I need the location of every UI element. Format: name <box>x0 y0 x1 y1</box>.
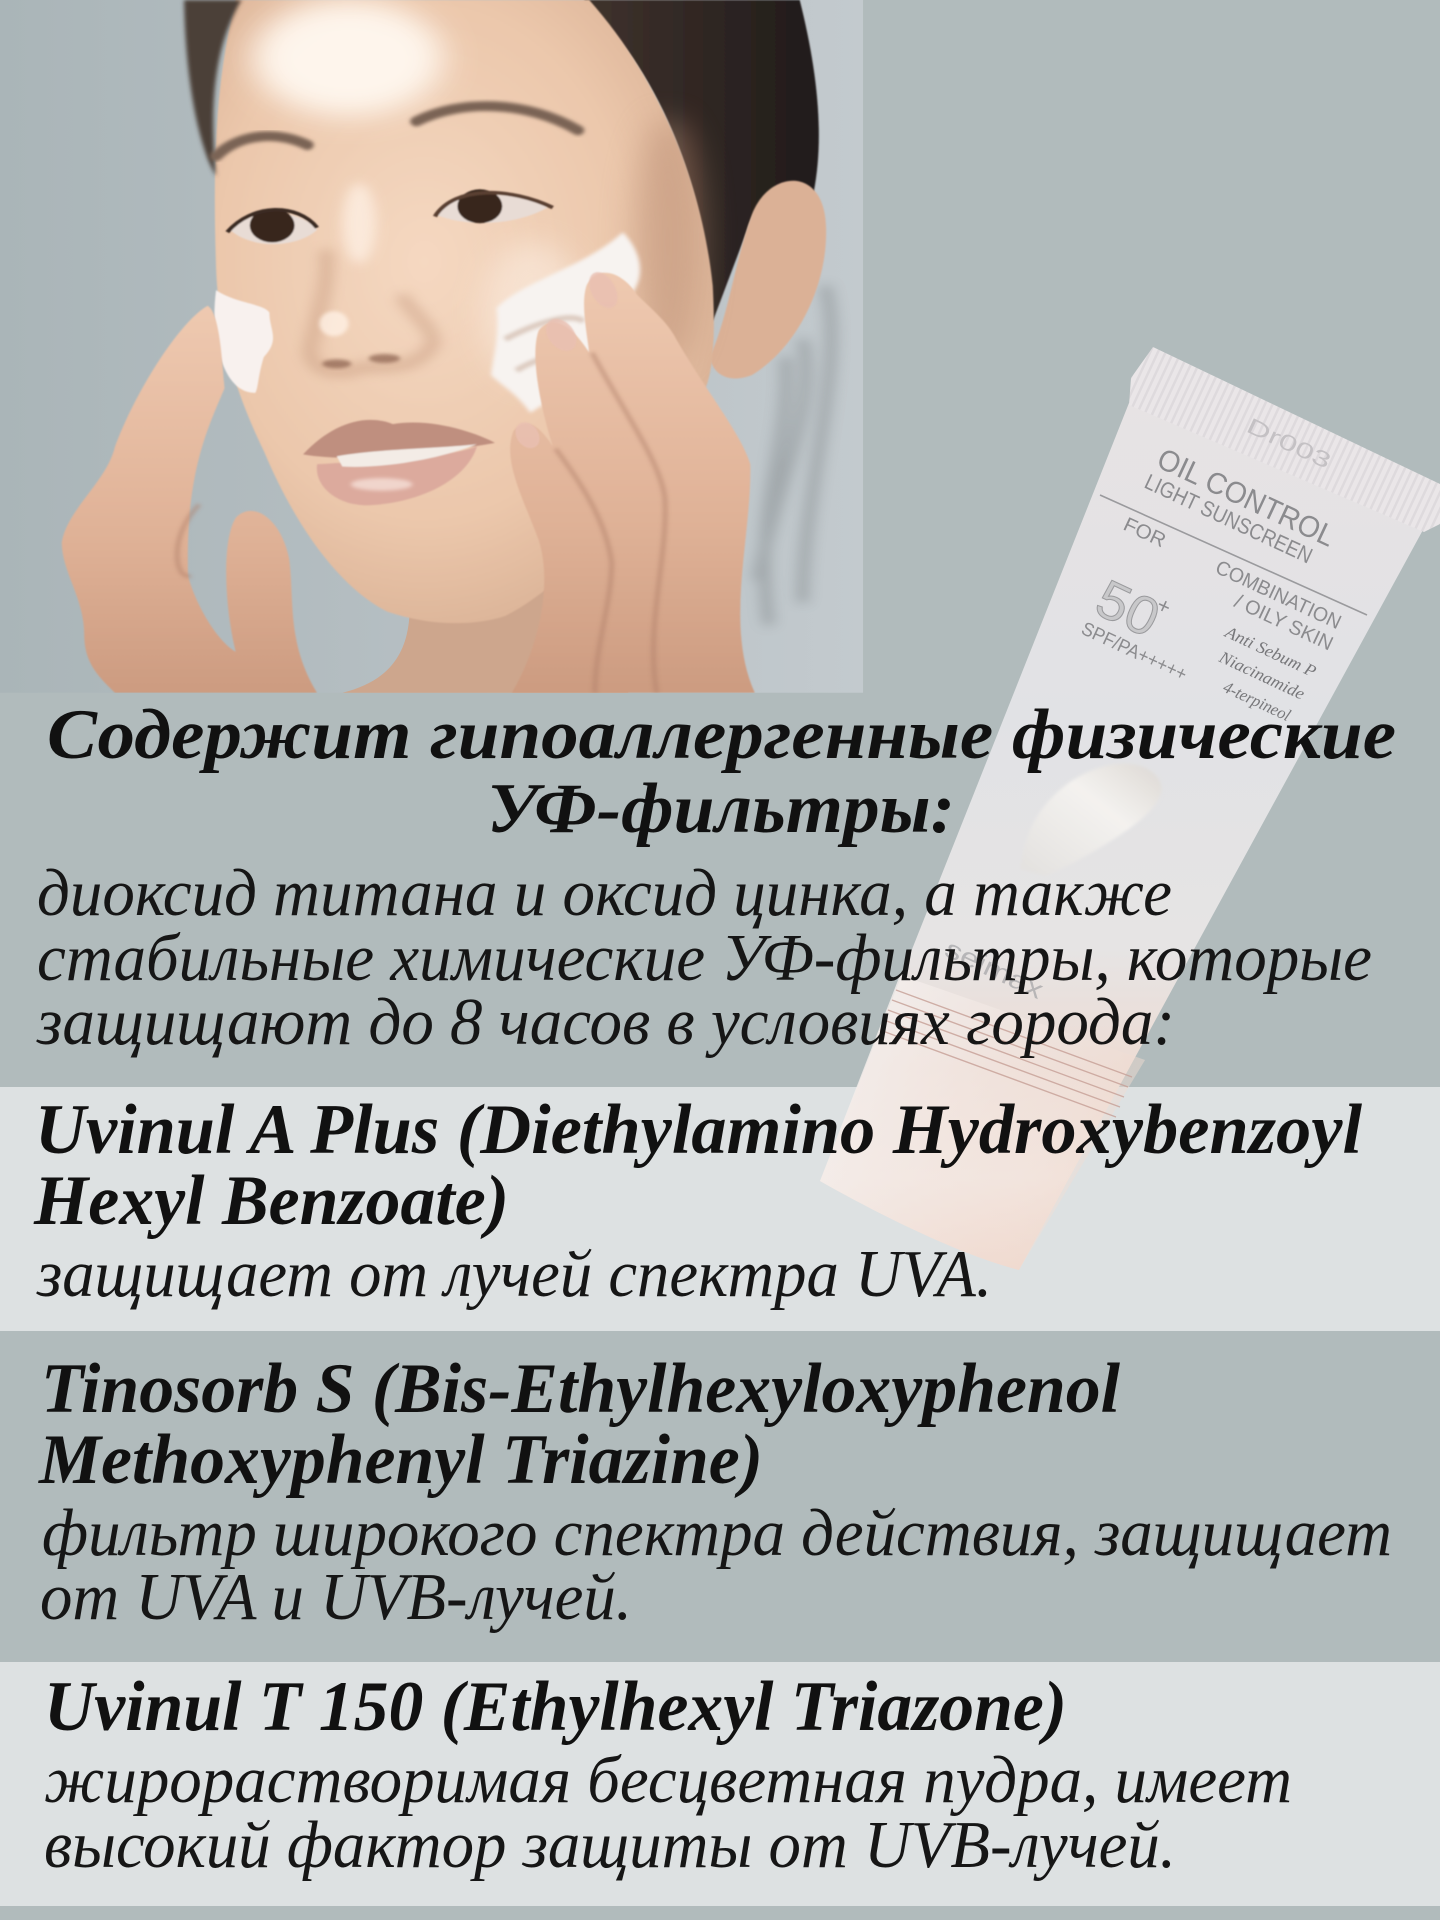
face skin <box>215 0 714 623</box>
block: Tinosorb S <box>38 1350 1392 1634</box>
lips <box>303 420 495 505</box>
SPF number: 50 <box>1087 568 1168 649</box>
description line 2: от UVA и UVB-лучей. <box>40 1560 632 1634</box>
eyebrow: left <box>216 136 308 156</box>
photo: woman applying sunscreen <box>0 0 863 693</box>
fingernails <box>516 272 602 448</box>
tube divider <box>1100 495 1367 615</box>
block: Uvinul A Plus <box>33 1091 1362 1311</box>
name: Uvinul T 150 (Ethylhexyl Triazone) <box>44 1668 1067 1746</box>
neck <box>342 580 629 693</box>
tube crimp <box>1129 347 1440 532</box>
heading <box>47 696 1396 848</box>
skin type 2: / OILY SKIN <box>1231 591 1336 655</box>
ear <box>710 181 826 378</box>
nose <box>310 183 433 372</box>
name line 1: Tinosorb S (Bis-Ethylhexyloxyphenol <box>41 1350 1120 1428</box>
hair: right <box>584 0 819 321</box>
hand: left <box>62 306 317 693</box>
cream: left cheek <box>214 290 273 393</box>
eyebrow: right <box>416 106 578 130</box>
intro line 3: защищают до 8 часов в условиях города: <box>36 985 1175 1059</box>
eye: right <box>435 189 553 223</box>
product tube <box>820 347 1440 1270</box>
finger separations <box>177 353 665 693</box>
intro line 1: диоксид титана и оксид цинка, а также <box>37 856 1172 930</box>
brand emboss: Dr003 <box>1243 413 1335 474</box>
intro text <box>36 856 1372 1059</box>
band: Uvinul A Plus <box>0 1087 1440 1331</box>
ingredient 1: Anti Sebum P <box>1221 622 1319 681</box>
for label: FOR <box>1120 514 1169 552</box>
description: защищает от лучей спектра UVA. <box>36 1237 992 1311</box>
shading on cream <box>505 318 584 371</box>
ingredient 2: Niacinamide <box>1215 647 1308 704</box>
name line 2: Hexyl Benzoate) <box>33 1162 509 1240</box>
intro line 2: стабильные химические УФ-фильтры, которые <box>37 921 1372 995</box>
name line 1: Uvinul A Plus (Diethylamino Hydroxybenzoyl <box>35 1091 1362 1169</box>
icon: back hair wisps <box>758 286 831 625</box>
brand logo: seimax <box>940 933 1048 1005</box>
hand: right <box>510 273 755 693</box>
description line 1: жирорастворимая бесцветная пудра, имеет <box>44 1743 1292 1817</box>
SPF label: SPF/PA+++++ <box>1078 618 1190 686</box>
block: Uvinul T 150 <box>44 1668 1292 1882</box>
description line 2: высокий фактор защиты от UVB-лучей. <box>44 1808 1176 1882</box>
pink stripes <box>880 990 1132 1117</box>
heading line 2: УФ-фильтры: <box>487 770 955 848</box>
hair: left strand <box>184 0 241 176</box>
plus sign: + <box>1153 592 1175 620</box>
cream swatch <box>1020 764 1162 876</box>
tube bottom glow <box>820 975 1145 1270</box>
eye: left <box>227 208 317 244</box>
cheek shade <box>634 116 701 366</box>
heading line 1: Содержит гипоаллергенные физические <box>47 696 1396 774</box>
name line 2: Methoxyphenyl Triazine) <box>38 1421 763 1499</box>
shadow under cream: right cheek <box>477 239 574 360</box>
band: Uvinul T 150 <box>0 1662 1440 1906</box>
description line 1: фильтр широкого спектра действия, защищает <box>42 1496 1392 1570</box>
ingredient 3: 4-terpineol <box>1220 677 1294 725</box>
product subtitle: LIGHT SUNSCREEN <box>1141 469 1316 568</box>
tube body <box>820 403 1424 1270</box>
cream: right cheek <box>491 232 640 413</box>
forehead highlight <box>253 0 443 116</box>
product name: OIL CONTROL <box>1152 442 1340 553</box>
skin type: COMBINATION <box>1212 557 1344 634</box>
